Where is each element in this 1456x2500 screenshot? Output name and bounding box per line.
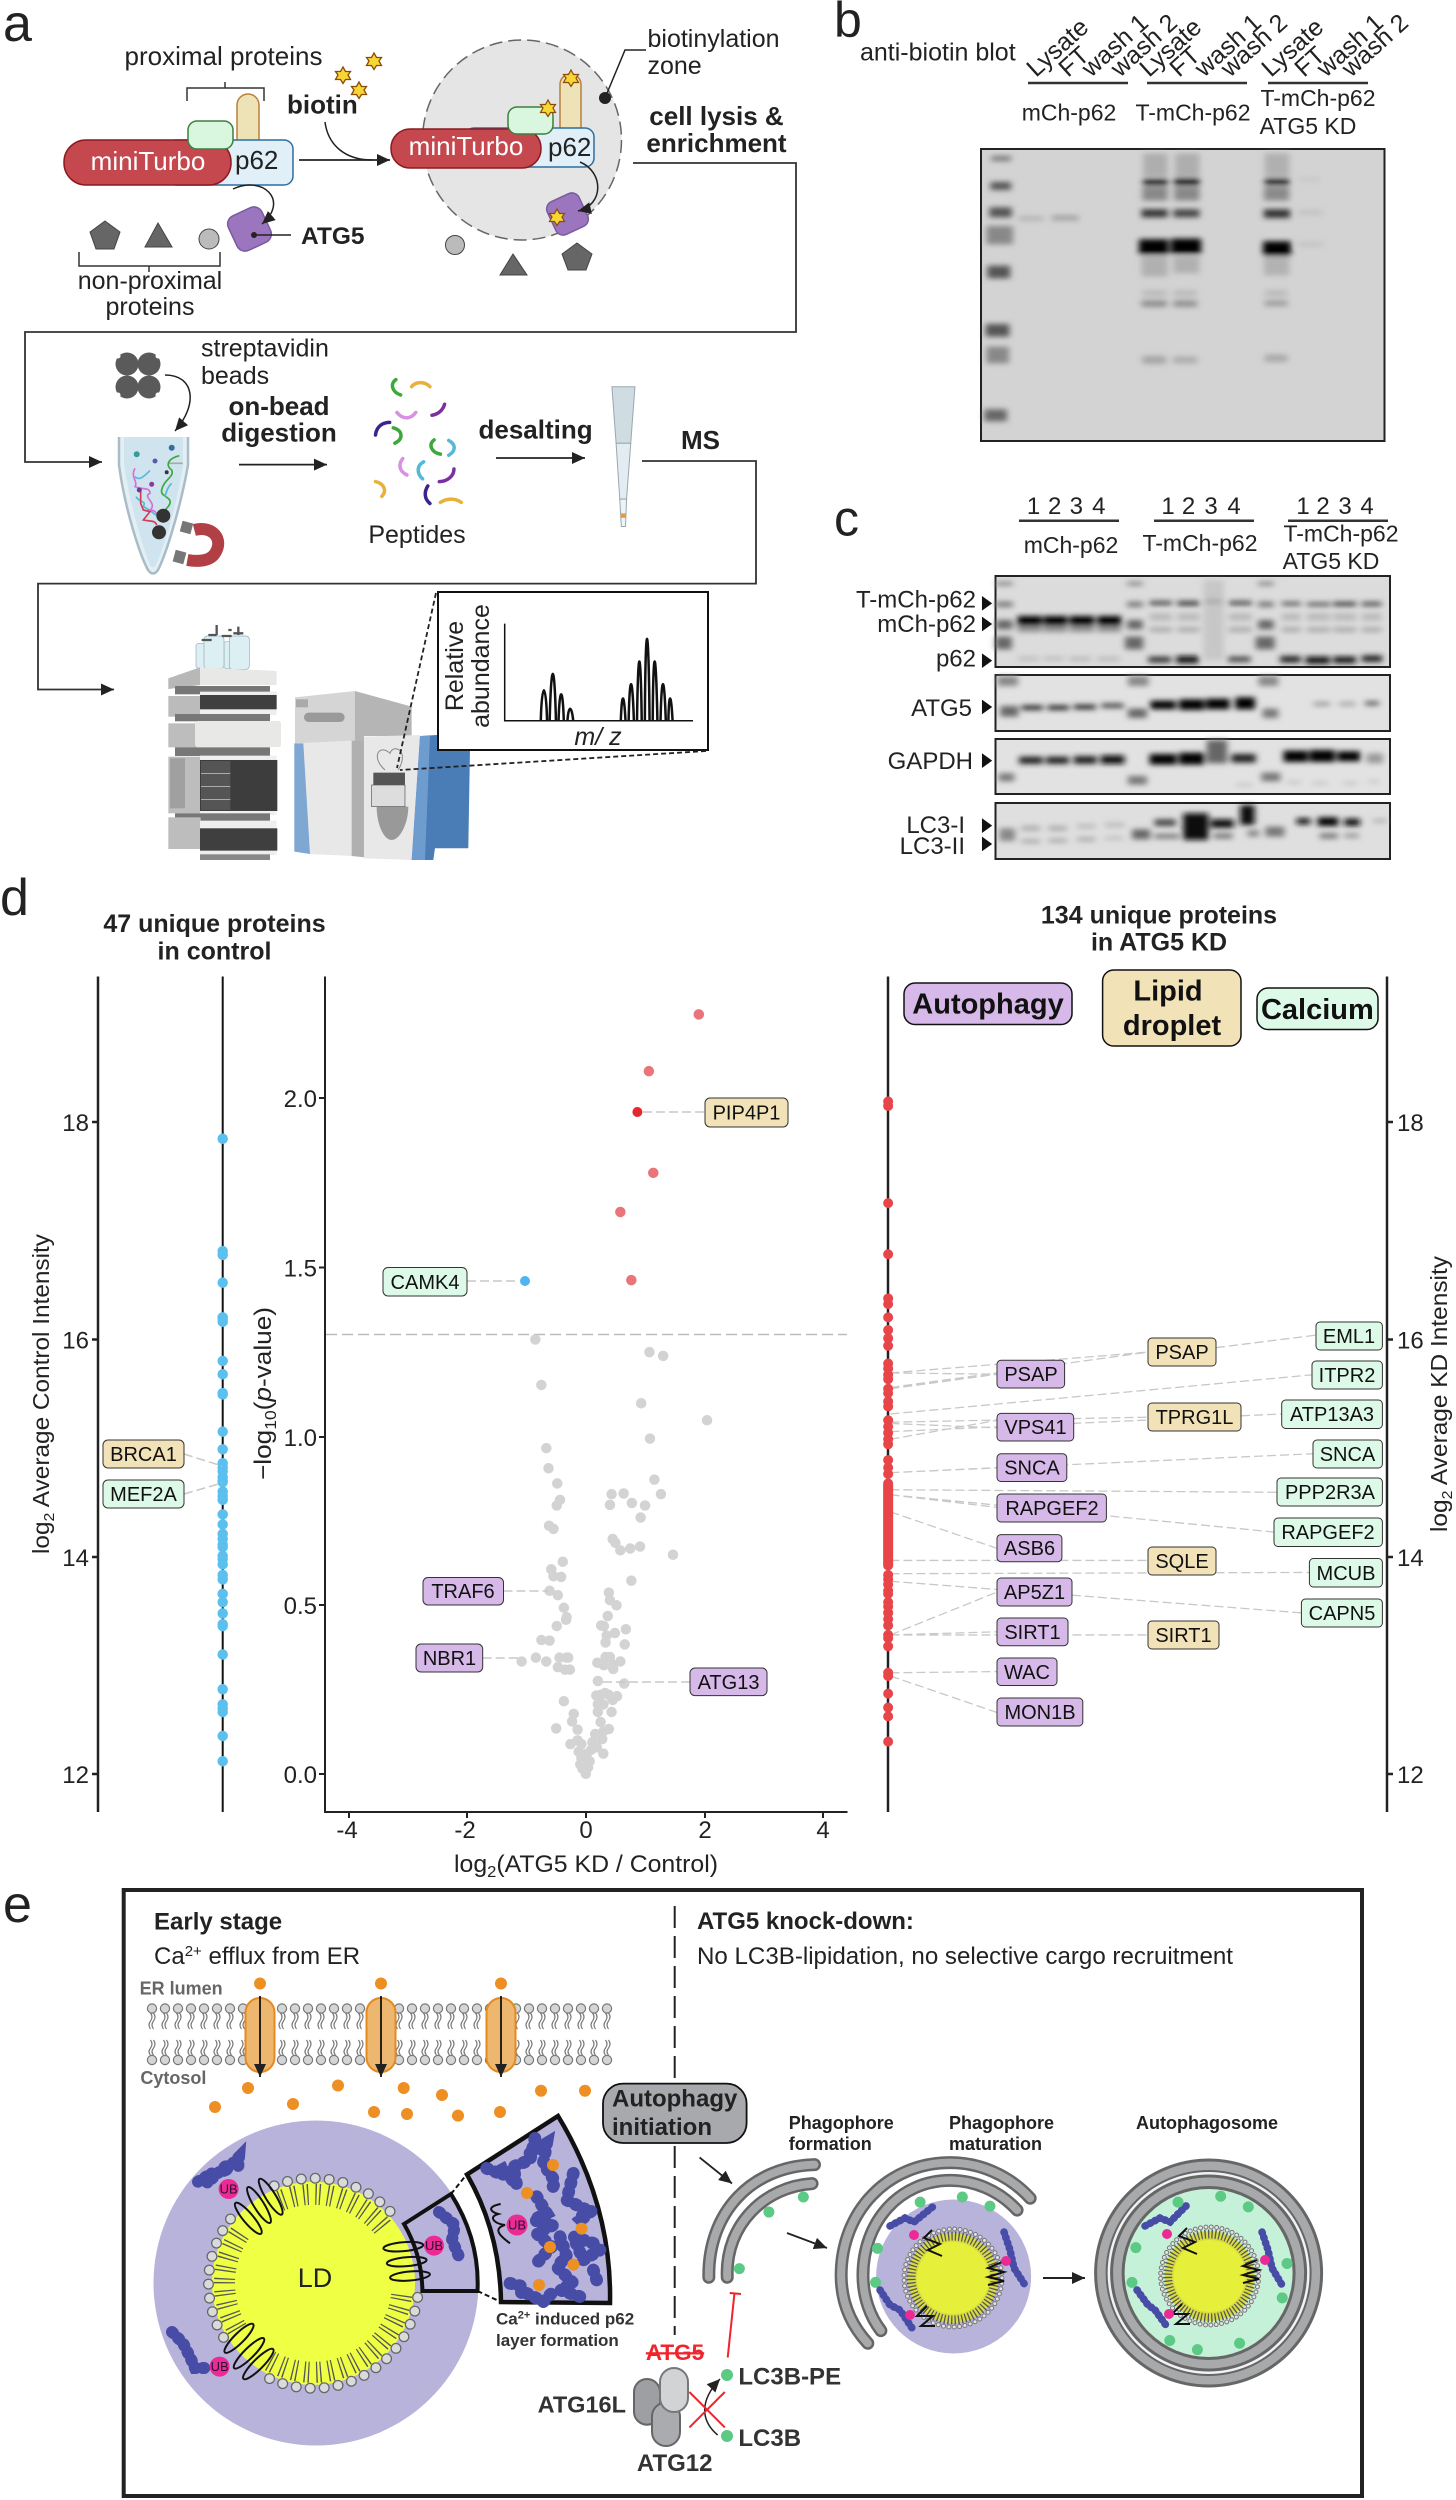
caption: p62 layer formation: layer formation [496, 2331, 619, 2350]
autophagy protein labels: RAPGEF2 [1005, 1498, 1099, 1520]
coils on droplet surface [221, 2176, 430, 2382]
y axis title: p-value) [250, 1314, 277, 1402]
x tick labels [336, 1817, 830, 1844]
panel letter e: e [3, 1876, 32, 1934]
divider: early stage versus knock-down [674, 1906, 676, 2335]
construct: miniTurbo p62 labelled: p62 [548, 132, 591, 162]
axis label: relative abundance: Relative [441, 621, 469, 711]
biotinylation zone [422, 40, 622, 240]
y axis title: ( [250, 1402, 277, 1410]
text: calcium efflux: 2+ [185, 1943, 202, 1960]
ubiquitin markers: UB [425, 2238, 443, 2253]
badge: autophagy initiation: initiation [612, 2114, 712, 2141]
lane labels: wash 1 [1189, 9, 1267, 83]
heading: 47 unique proteins in control: 47 unique proteins [103, 910, 326, 938]
blot bands [995, 580, 1387, 843]
label: peptides: Peptides [368, 521, 466, 549]
panel letter c: c [834, 491, 859, 547]
label: NBR1 [416, 1644, 483, 1672]
panel letter d: d [0, 869, 29, 927]
protein labels: LC3-I [906, 812, 965, 839]
stage labels [789, 2113, 1278, 2154]
calcium protein labels: ATP13A3 [1290, 1404, 1374, 1426]
lane numbers: 1 [1296, 493, 1310, 520]
blue data points [217, 1139, 228, 1761]
spectrum peaks [505, 624, 693, 721]
autophagy protein labels: AP5Z1 [1004, 1582, 1065, 1604]
category: Calcium: Calcium [1261, 994, 1374, 1026]
text: calcium efflux: efflux from ER [202, 1943, 360, 1970]
calcium protein labels: SNCA [1320, 1444, 1376, 1466]
label: MEF2A: MEF2A [110, 1484, 177, 1506]
group labels: T-mCh-p62 [1142, 530, 1258, 556]
inhibition line [728, 2293, 741, 2358]
construct: miniTurbo p62 labelled: miniTurbo [409, 131, 523, 161]
lane numbers: 4 [1227, 493, 1241, 520]
group labels: ATG5 KD [1260, 113, 1356, 139]
autophagy protein labels: SIRT1 [1004, 1622, 1061, 1644]
inset wedge 2 [467, 2116, 610, 2303]
label: on-bead digestion: digestion [221, 418, 337, 448]
autophagy protein labels: SNCA [1004, 1458, 1060, 1480]
label: ATG5 struck through: ATG5 [646, 2340, 704, 2365]
lane labels: wash 2 [1215, 9, 1293, 83]
label: ATG13: ATG13 [698, 1672, 759, 1694]
lane numbers: 2 [1316, 493, 1330, 520]
axes [319, 976, 848, 1818]
y tick labels: 1.5 [284, 1256, 317, 1282]
calcium ions [209, 1978, 591, 2122]
significance threshold [326, 1334, 847, 1336]
icon: magnetic tube [119, 437, 188, 574]
label: proximal proteins: proximal proteins [124, 41, 322, 71]
right y tick labels: 12 [1397, 1762, 1424, 1789]
arrow: LC3B lipidation [705, 2379, 720, 2435]
badge: autophagy initiation: Autophagy [612, 2086, 738, 2112]
group labels [1022, 85, 1376, 139]
label: streptavidin beads: beads [201, 362, 269, 390]
construct: miniTurbo p62 before labelling: p62 [235, 145, 278, 175]
p62 phase: purple disc [154, 2120, 478, 2446]
label: anti-biotin blot: anti-biotin blot [860, 39, 1016, 67]
lane labels: Lysate [1134, 13, 1207, 82]
lane labels: Lysate [1021, 13, 1094, 82]
lane labels: FT [1053, 41, 1095, 82]
panel e: left, early stage [140, 1908, 634, 2446]
autophagy protein labels: ASB6 [1004, 1538, 1055, 1560]
construct: miniTurbo p62 before labelling: miniTurbo [91, 146, 205, 176]
icon: pipette tip [612, 387, 635, 527]
red data points [883, 1101, 893, 1742]
panel b: anti-biotin blot [860, 9, 1414, 441]
stage labels: Phagophore [949, 2113, 1054, 2133]
y tick labels [62, 1110, 89, 1789]
calcium ions in inset [521, 2159, 588, 2291]
lane numbers: 1 [1027, 493, 1040, 520]
axis label: m/z: m/ z [574, 723, 622, 751]
x axis title: (ATG5 KD / Control) [496, 1851, 718, 1878]
leader: biotinylation zone [605, 50, 646, 98]
x tick labels: 0 [579, 1817, 593, 1844]
lipid droplet protein labels: TPRG1L [1156, 1407, 1233, 1429]
group labels: ATG5 KD [1283, 548, 1379, 574]
label: LC3B: LC3B [738, 2425, 801, 2452]
group labels: T-mCh-p62 [1260, 85, 1376, 111]
arrow: formation to maturation [787, 2233, 827, 2248]
red significant points [620, 1014, 699, 1280]
arrow: digestion [239, 464, 327, 466]
calcium channels with arrows [246, 1996, 516, 2077]
lipid droplet protein labels: SIRT1 [1155, 1625, 1212, 1647]
y tick labels: 16 [62, 1328, 89, 1354]
icon: streptavidin beads [116, 352, 160, 398]
label: TRAF6 [423, 1578, 504, 1605]
label: BRCA1 [103, 1440, 184, 1468]
y axis [92, 976, 98, 1812]
x axis title: log [454, 1851, 486, 1878]
blot backgrounds [996, 576, 1390, 859]
icon: mass spectrometer [294, 691, 470, 860]
panel e: model frame [124, 1890, 1362, 2496]
icon: magnet [173, 521, 218, 564]
mCh-p62 lanes [1017, 616, 1121, 626]
stage labels: formation [789, 2134, 872, 2154]
y tick labels: 0.5 [284, 1593, 317, 1620]
lane labels: wash 2 [1336, 9, 1414, 83]
gray non-significant points [522, 1339, 707, 1774]
label: non-proximal proteins: proteins [106, 293, 194, 321]
phagophore maturation [841, 2163, 1031, 2354]
ubiquitin markers: UB [220, 2182, 238, 2196]
label: ATG12: ATG12 [637, 2450, 712, 2477]
GAPDH bands [1019, 755, 1124, 764]
y tick labels [284, 1086, 317, 1789]
category: Lipid droplet [1103, 970, 1241, 1046]
lane numbers: 3 [1070, 493, 1083, 520]
bracket: proximal proteins [187, 82, 264, 101]
lane numbers: 4 [1360, 493, 1374, 520]
construct: miniTurbo p62 labelled [391, 70, 598, 238]
autophagy protein labels: MON1B [1004, 1702, 1076, 1724]
right y tick labels: 14 [1397, 1545, 1424, 1572]
label: cell lysis and enrichment: cell lysis & [649, 101, 784, 131]
inset wedge 1 [404, 2194, 478, 2291]
text: calcium efflux: Ca [154, 1943, 185, 1970]
panel d: volcano plot [250, 976, 848, 1881]
LC3 bands [1022, 823, 1124, 843]
right y axis title: 2 [1439, 1491, 1456, 1499]
right y tick labels: 18 [1397, 1110, 1424, 1137]
lipid droplet protein labels: PSAP [1155, 1342, 1209, 1364]
heading: 47 unique proteins in control: in control [158, 938, 271, 966]
label: LD: LD [298, 2263, 332, 2293]
lane labels: FT [1164, 41, 1206, 82]
panel a: proximity labelling workflow [25, 25, 796, 860]
autophagosome [1094, 2158, 1323, 2388]
caption: p62 layer formation: 2+ [518, 2310, 530, 2322]
p62 clusters in inset [487, 2138, 600, 2302]
lane numbers: 2 [1048, 493, 1061, 520]
label: streptavidin beads: streptavidin [201, 334, 329, 362]
x tick labels: -4 [336, 1817, 358, 1844]
construct: miniTurbo p62 before labelling [64, 94, 293, 185]
CAMK4 point [520, 1276, 530, 1286]
icons: non-proximal proteins [90, 221, 219, 249]
text: no LC3B-lipidation: No LC3B-lipidation, no selective cargo recruitment [697, 1943, 1233, 1970]
y axis title: log [28, 1523, 54, 1554]
lipid droplet protein labels [1148, 1338, 1241, 1649]
dot: biotinylation zone leader [599, 92, 611, 104]
calcium protein labels: CAPN5 [1309, 1603, 1375, 1625]
zoom connectors [451, 2174, 501, 2302]
y axis title: −log [250, 1434, 277, 1480]
lane labels: wash 1 [1076, 9, 1154, 83]
label: MEF2A [103, 1480, 184, 1508]
category: Autophagy: Autophagy [912, 989, 1064, 1021]
PIP4P1 point [632, 1107, 642, 1117]
category: Lipid droplet: droplet [1123, 1010, 1221, 1042]
group labels: mCh-p62 [1022, 100, 1116, 126]
badge: autophagy initiation [603, 2084, 747, 2143]
leaders [467, 1112, 705, 1682]
LC3B dots [721, 2369, 733, 2442]
panel c: western blots [856, 493, 1399, 860]
label: cytosol: Cytosol [140, 2068, 206, 2088]
protein labels: T-mCh-p62 [856, 587, 976, 614]
right y axis title: Average KD Intensity [1426, 1255, 1452, 1491]
connector arrow: MS to instrument [38, 461, 756, 690]
y tick labels: 1.0 [284, 1425, 317, 1452]
label: CAMK4 [383, 1268, 467, 1296]
red X: blocked lipidation [689, 2392, 725, 2427]
arrow: beads to tube [165, 375, 190, 431]
lane numbers: 4 [1092, 493, 1105, 520]
arrowheads [982, 596, 992, 851]
label: ATG13 [690, 1668, 767, 1696]
group labels [1024, 521, 1399, 574]
axis label: relative abundance: abundance [467, 604, 495, 728]
label: PIP4P1: PIP4P1 [713, 1102, 780, 1124]
calcium protein labels: ITPR2 [1319, 1365, 1375, 1387]
category: Autophagy [904, 983, 1072, 1024]
right y axis title: log [1426, 1501, 1452, 1532]
connector arrow: lysis to beads [25, 163, 796, 462]
caption: p62 layer formation: induced p62 [530, 2310, 634, 2329]
protein labels: GAPDH [888, 748, 973, 775]
icon: peptides [376, 380, 461, 504]
icon: ATG5 protein with curved arrow [225, 185, 365, 254]
arrow: desalting [496, 457, 585, 459]
label: ATG16L: ATG16L [538, 2391, 626, 2417]
label: biotinylation zone: zone [648, 52, 702, 80]
blot image [981, 149, 1384, 441]
x tick labels: -2 [454, 1817, 476, 1844]
autophagy protein labels: VPS41 [1004, 1417, 1067, 1439]
arrow: initiation to phagophore [700, 2158, 732, 2184]
protein labels [856, 587, 976, 860]
lipid droplet protein labels: SQLE [1155, 1551, 1209, 1573]
icon: liquid chromatography stack [168, 625, 281, 860]
autophagy protein labels: PSAP [1004, 1364, 1058, 1386]
group labels: mCh-p62 [1024, 532, 1118, 558]
stage labels: Phagophore [789, 2113, 894, 2133]
blot bands [984, 153, 1323, 421]
calcium protein labels: PPP2R3A [1285, 1482, 1376, 1504]
heading: ATG5 knock-down: ATG5 knock-down: [697, 1908, 914, 1935]
group underlines [1028, 82, 1368, 84]
label: non-proximal proteins: non-proximal [78, 267, 222, 295]
coil fragment in inset [491, 2204, 510, 2243]
label: NBR1: NBR1 [423, 1648, 476, 1670]
y tick labels: 18 [62, 1110, 89, 1137]
y axis title: 2 [41, 1513, 58, 1521]
label: PIP4P1 [705, 1098, 788, 1127]
icon: ATG5 protein with curved arrow: ATG5 [301, 223, 365, 250]
heading: early stage: Early stage [154, 1908, 282, 1935]
T-mCh-p62 lanes [1148, 600, 1382, 664]
calcium protein labels: EML1 [1323, 1326, 1375, 1348]
label: on-bead digestion: on-bead [228, 391, 330, 421]
label: cell lysis and enrichment: enrichment [646, 128, 787, 158]
lane labels: FT [1289, 41, 1331, 82]
lipid droplet [208, 2178, 418, 2388]
leaders: BRCA1 and MEF2A [184, 1454, 222, 1494]
x tick labels: 4 [816, 1817, 830, 1844]
right y axis [1387, 976, 1393, 1812]
panel e: right, ATG5 knock-down [538, 1908, 1323, 2477]
stage labels: Autophagosome [1136, 2113, 1278, 2133]
label: BRCA1: BRCA1 [110, 1444, 177, 1466]
label: CAMK4: CAMK4 [391, 1272, 459, 1294]
bracket: non-proximal proteins [79, 252, 220, 272]
heading: 134 unique proteins in ATG5 KD: in ATG5 KD [1091, 929, 1227, 957]
protein labels: ATG5 [911, 695, 972, 722]
lane numbers [1027, 493, 1374, 520]
panel d: right strip plot, ATG5 KD proteins [888, 902, 1456, 1812]
lane labels: wash 1 [1311, 9, 1389, 83]
group underlines [1019, 519, 1388, 522]
y tick labels: 2.0 [284, 1086, 317, 1113]
protein labels: p62 [936, 646, 976, 673]
zoom lines from instrument to inset [397, 593, 706, 770]
label: biotinylation zone: biotinylation [648, 25, 780, 53]
icons: non-proximal proteins outside zone [446, 236, 592, 275]
label: ER lumen: ER lumen [140, 1979, 223, 1999]
label: LC3B-PE: LC3B-PE [738, 2364, 841, 2391]
y tick labels: 0.0 [284, 1762, 317, 1789]
caption: p62 layer formation: Ca [496, 2310, 518, 2329]
stage labels: maturation [949, 2134, 1042, 2154]
arrow: maturation to autophagosome [1043, 2277, 1085, 2279]
protein labels: LC3-II [900, 833, 965, 860]
autophagy protein labels [997, 1360, 1106, 1726]
right y tick labels: 16 [1397, 1328, 1424, 1354]
lane numbers: 3 [1204, 493, 1218, 520]
y axis title: 10 [263, 1410, 280, 1430]
ATG5 bands [1022, 703, 1124, 710]
protein labels: mCh-p62 [877, 611, 976, 638]
calcium protein labels: RAPGEF2 [1281, 1522, 1375, 1544]
y axis title: Average Control Intensity [28, 1233, 54, 1513]
strip axis [222, 976, 224, 1812]
ER membrane [146, 2002, 614, 2068]
lane numbers: 3 [1338, 493, 1352, 520]
ubiquitin markers [210, 2179, 528, 2377]
panel d: left strip plot, control proteins [28, 910, 326, 1812]
inset: mass spectrum [438, 592, 708, 751]
arrow: biotin addition [299, 122, 390, 160]
lane numbers: 2 [1182, 493, 1195, 520]
label: MS: MS [681, 425, 720, 455]
lane numbers: 1 [1161, 493, 1175, 520]
group labels: T-mCh-p62 [1283, 521, 1399, 547]
group labels: T-mCh-p62 [1135, 100, 1251, 126]
heading: 134 unique proteins in ATG5 KD: 134 unique proteins [1041, 902, 1277, 930]
lane labels [1021, 9, 1414, 83]
label: desalting: desalting [478, 415, 593, 445]
phagophore [709, 2165, 814, 2277]
category: Lipid droplet: Lipid [1133, 976, 1203, 1008]
x tick labels: 2 [698, 1817, 712, 1844]
calcium protein labels: MCUB [1317, 1563, 1375, 1585]
ATG12-ATG5-ATG16L complex [634, 2368, 688, 2446]
strip axis [887, 976, 889, 1812]
lane labels: Lysate [1256, 13, 1329, 82]
calcium protein labels [1274, 1322, 1382, 1627]
y tick labels: 12 [62, 1762, 89, 1789]
p62 clusters on disc [172, 2157, 460, 2368]
ubiquitin markers: UB [508, 2218, 526, 2232]
label: biotin: biotin [287, 90, 358, 120]
label: TRAF6: TRAF6 [431, 1581, 495, 1603]
x axis title: 2 [487, 1864, 496, 1881]
icons: biotin stars [336, 53, 382, 98]
lane labels: wash 2 [1105, 9, 1183, 83]
y tick labels: 14 [62, 1545, 89, 1572]
leaders to protein labels [890, 1335, 1316, 1713]
ubiquitin markers: UB [211, 2359, 229, 2374]
right y tick labels [1397, 1110, 1424, 1789]
autophagy protein labels: WAC [1004, 1662, 1050, 1684]
